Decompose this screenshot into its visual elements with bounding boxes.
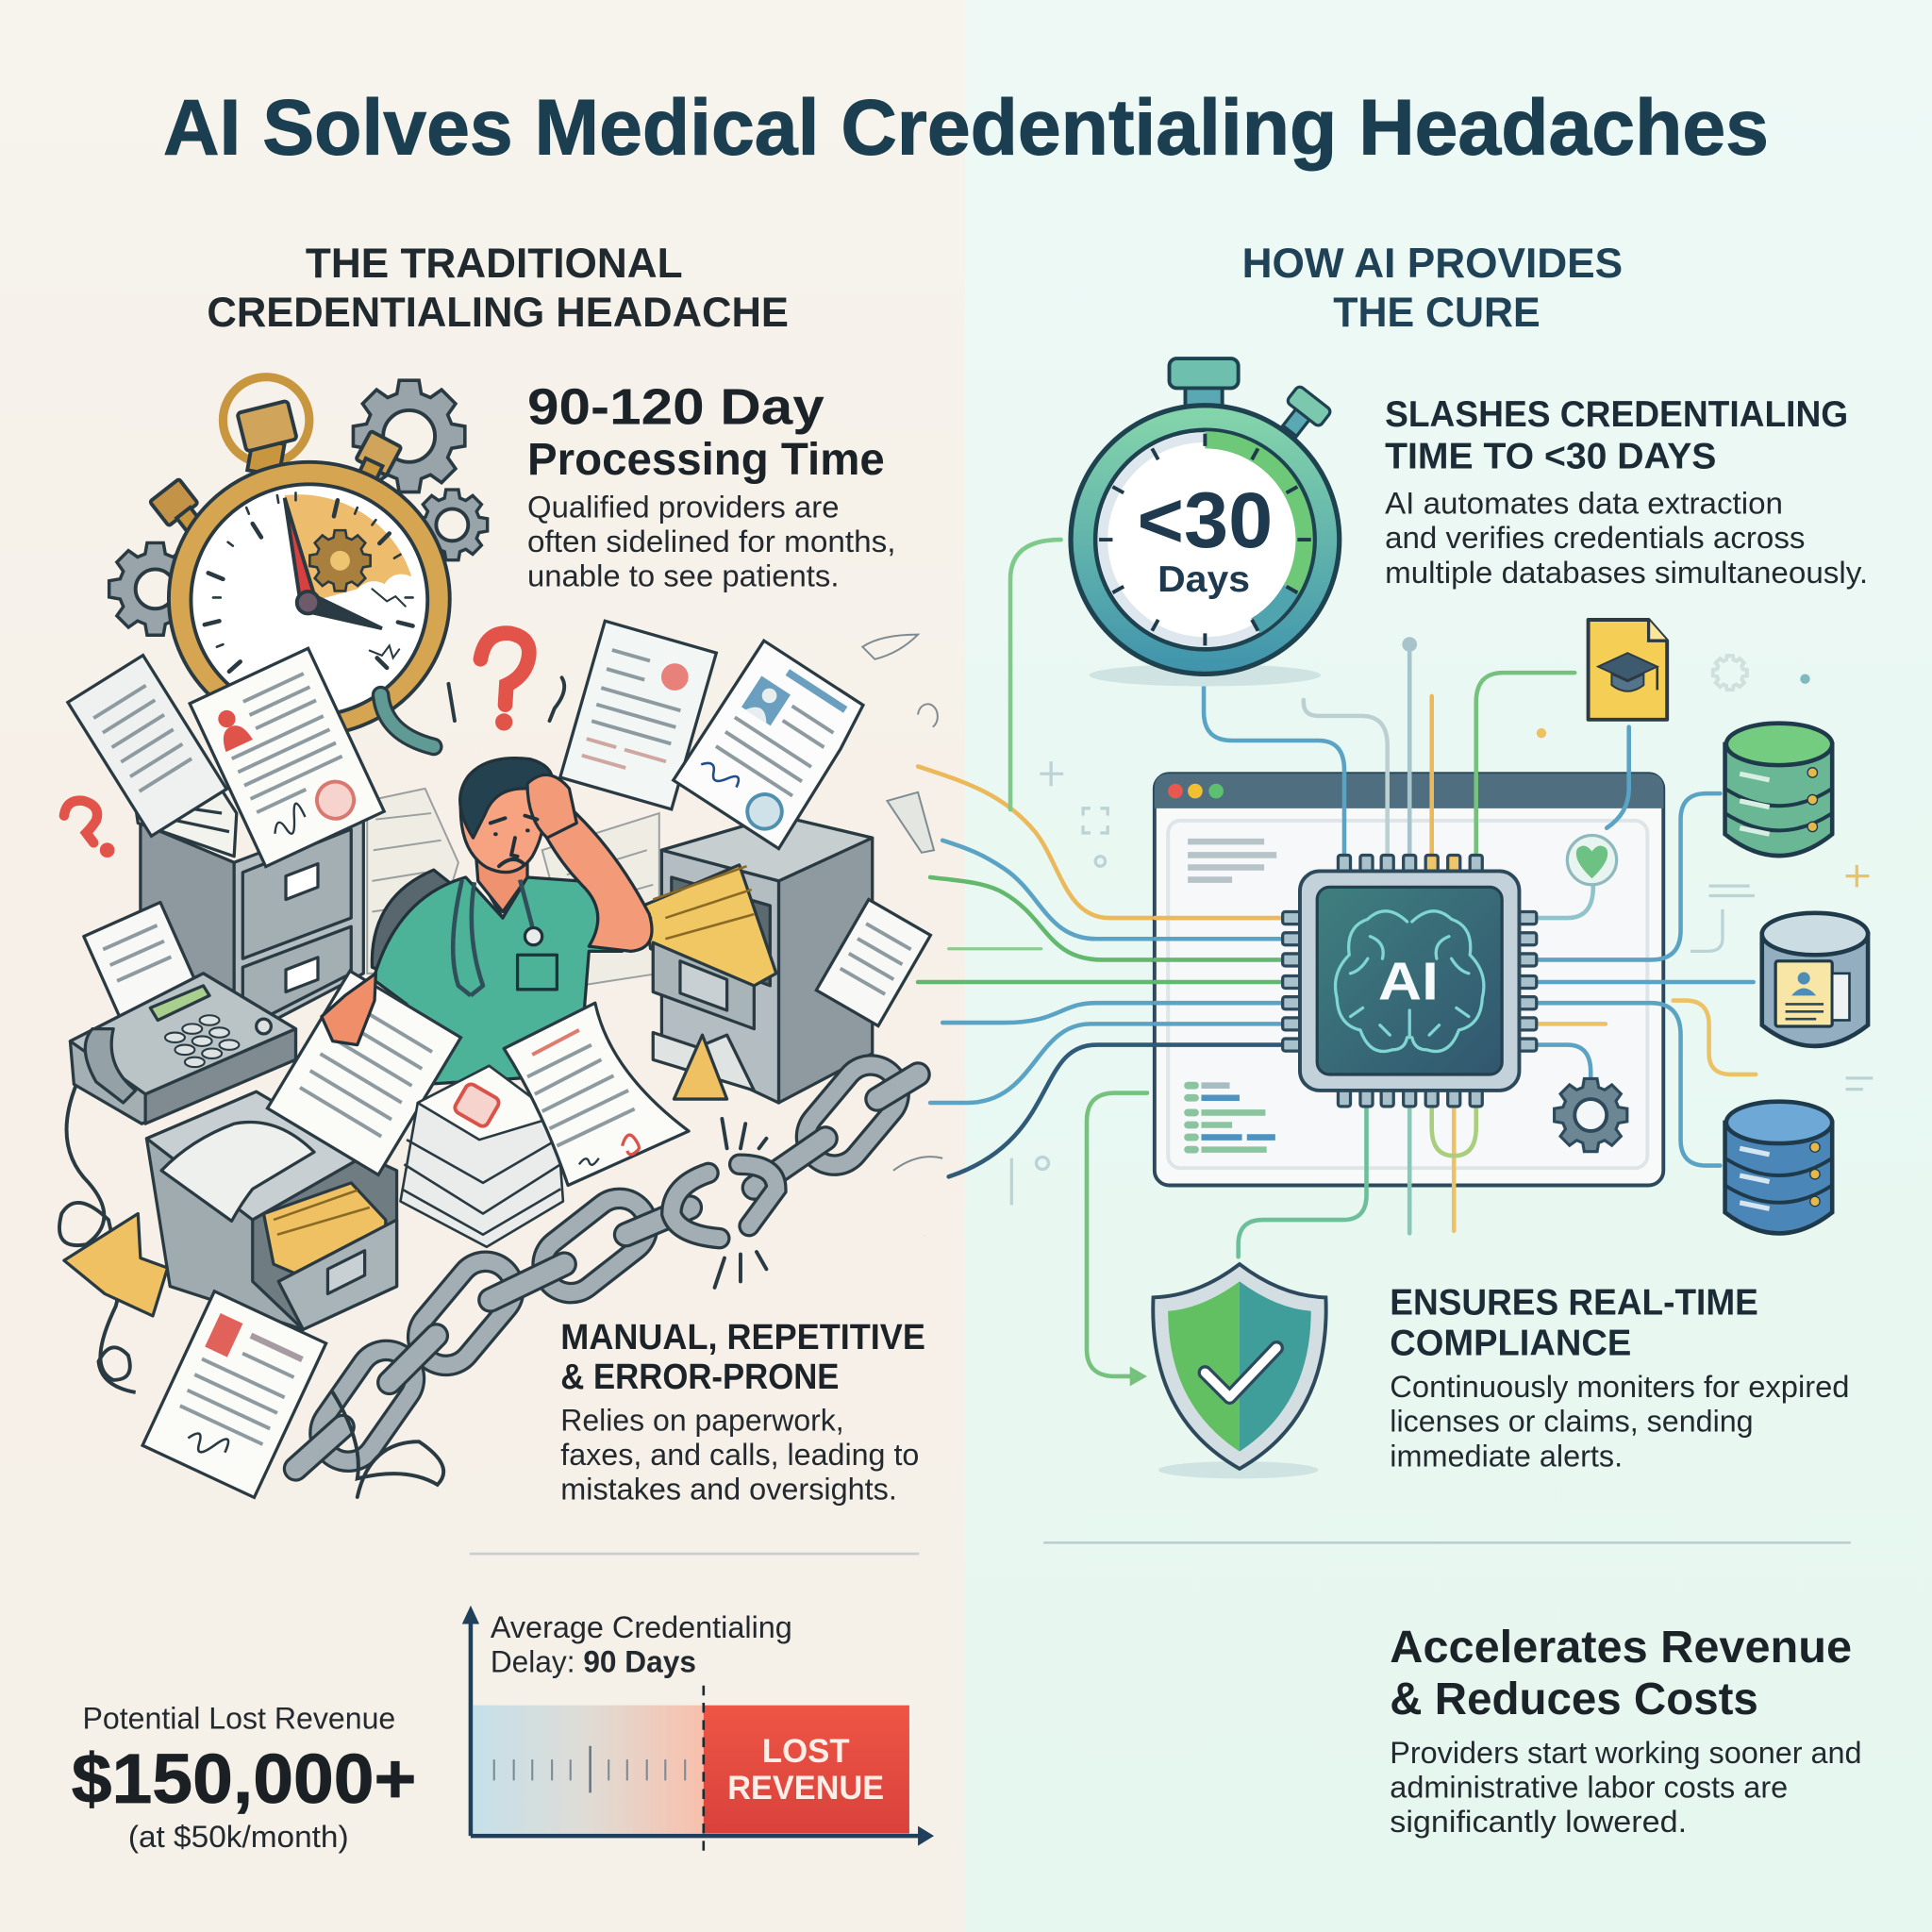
right background <box>965 0 1932 1932</box>
text: processing time: Qualified providers are <box>527 490 839 525</box>
clock case <box>169 462 450 736</box>
icon: green database <box>1725 724 1832 856</box>
icon: telephone handset <box>381 695 434 747</box>
illustration: circuit lines <box>1087 637 1756 1386</box>
text: accelerates revenue: Accelerates Revenue <box>1390 1622 1852 1673</box>
chain edge links <box>295 1074 918 1469</box>
text: processing time: unable to see patients. <box>527 558 839 593</box>
outer ring <box>1071 406 1340 674</box>
day ticks <box>494 1759 685 1780</box>
illustration: fax machine <box>70 903 295 1124</box>
clock hands <box>285 498 315 604</box>
icon: credential document <box>1589 620 1667 720</box>
illustration: yellow folder <box>64 1214 168 1316</box>
stat: potential lost revenue: $150,000+ <box>72 1740 416 1818</box>
text: accelerates revenue: administrative labor costs are <box>1390 1770 1788 1805</box>
text: manual repetitive: & ERROR-PRONE <box>560 1357 839 1397</box>
text: manual repetitive: faxes, and calls, leading to <box>560 1437 919 1472</box>
heading: AI cure: HOW AI PROVIDES <box>1242 241 1623 287</box>
chip pins <box>1283 855 1537 1107</box>
illustration: flowing data lines into chip <box>918 540 1283 1176</box>
text: manual repetitive <box>560 1318 925 1507</box>
chart: credentialing delay <box>462 1606 934 1855</box>
icon: gears <box>109 380 488 635</box>
document to emblem <box>1607 727 1629 828</box>
heading: traditional headache <box>207 241 789 336</box>
text: accelerates revenue: & Reduces Costs <box>1390 1674 1758 1724</box>
small gear on dial <box>309 530 371 591</box>
text: manual repetitive: Relies on paperwork, <box>560 1402 844 1437</box>
paper: stamped form <box>560 621 716 809</box>
chart: credentialing delay: REVENUE <box>727 1770 884 1807</box>
icon: stopwatch under 30 days: Days <box>1158 559 1250 600</box>
illustration: lower filing cabinet <box>146 1091 397 1329</box>
text: real-time compliance: COMPLIANCE <box>1390 1324 1631 1364</box>
undershirt <box>480 880 524 918</box>
inbound left lines over window <box>1155 916 1283 920</box>
chair <box>372 870 458 986</box>
left background <box>0 0 965 1932</box>
arrow line to shield <box>1087 1093 1147 1376</box>
text: accelerates revenue: Providers start working sooner and <box>1390 1735 1862 1770</box>
window buttons <box>1168 784 1183 798</box>
crown <box>1185 386 1223 410</box>
text: real-time compliance: ENSURES REAL-TIME <box>1390 1283 1758 1324</box>
text: real-time compliance: Continuously moniters for expired <box>1390 1369 1849 1404</box>
broken link pieces <box>672 1173 720 1239</box>
inner panel <box>1168 821 1647 1168</box>
text: slashes credentialing time: multiple databases simultaneously. <box>1385 555 1868 590</box>
background paper piles behind doctor <box>367 789 659 986</box>
raised arm <box>537 808 652 951</box>
chain rings <box>308 1054 910 1473</box>
icon: gear in window <box>1555 1078 1627 1152</box>
text: slashes credentialing time: SLASHES CREDENTIALING <box>1385 394 1848 435</box>
illustration: paper stack <box>400 1066 563 1247</box>
dashed marker <box>703 1686 705 1855</box>
text: processing time: often sidelined for months, <box>527 524 896 558</box>
lost revenue block <box>704 1706 909 1834</box>
illustration: void-marked paper <box>504 1003 689 1185</box>
text: slashes credentialing time <box>1385 394 1868 590</box>
text: real-time compliance <box>1390 1283 1849 1473</box>
face ticks <box>1099 434 1311 645</box>
axes <box>471 1617 922 1836</box>
illustration: left filing cabinet <box>133 761 363 1041</box>
illustration: doctor's hand holding paper <box>322 974 375 1045</box>
text: accelerates revenue: significantly lowered. <box>1390 1804 1687 1839</box>
icon: red question marks <box>64 633 564 858</box>
page text lines <box>1188 841 1276 880</box>
AI chip <box>1283 855 1537 1107</box>
dial ticks <box>205 492 413 672</box>
right lines <box>1535 793 1720 959</box>
text: accelerates revenue <box>1390 1622 1862 1839</box>
stopwatch shadow <box>1090 664 1321 687</box>
text: manual repetitive: MANUAL, REPETITIVE <box>560 1318 925 1357</box>
green progress arc <box>1205 440 1305 589</box>
neck and face <box>475 850 527 912</box>
illustration: held paper <box>267 971 460 1174</box>
fax handset <box>85 1029 136 1103</box>
stat: potential lost revenue <box>72 1700 416 1854</box>
cable tangle <box>59 1084 136 1392</box>
side button <box>1274 385 1332 443</box>
label: <30 <box>1138 475 1273 564</box>
open drawer folders <box>643 865 776 986</box>
icon: blue database <box>1725 1102 1832 1233</box>
chart: credentialing delay: LOST <box>762 1733 850 1770</box>
paper: profile document with red stamp <box>190 648 384 867</box>
face details <box>491 816 537 866</box>
icon: stopwatch under 30 days <box>1071 358 1340 687</box>
heading: AI cure: THE CURE <box>1333 290 1541 336</box>
text: real-time compliance: licenses or claims, sending <box>1390 1404 1754 1439</box>
icon: records database <box>1762 913 1868 1046</box>
paper: blue ID document <box>674 641 870 849</box>
heading: traditional headache: CREDENTIALING HEADACHE <box>207 290 789 336</box>
fax paper <box>84 903 198 1021</box>
title: AI Solves Medical Credentialing Headaches <box>163 82 1769 171</box>
text: real-time compliance: immediate alerts. <box>1390 1438 1623 1473</box>
pocket <box>518 955 557 990</box>
chart label: Average Credentialing <box>491 1609 792 1644</box>
emblem link <box>1535 877 1593 918</box>
loose paper pile <box>133 761 237 857</box>
heading: AI cure <box>1242 241 1623 336</box>
text: slashes credentialing time: and verifies credentials across <box>1385 520 1805 555</box>
hand on head <box>527 774 576 838</box>
brain outline <box>1336 911 1484 1051</box>
heading: traditional headache: THE TRADITIONAL <box>306 241 683 287</box>
text: slashes credentialing time: TIME TO <30 DAYS <box>1385 436 1716 476</box>
illustration: browser window <box>1155 774 1663 1185</box>
tail cable <box>333 1392 443 1497</box>
top lines <box>1204 680 1344 855</box>
text: processing time: 90-120 Day <box>527 379 824 435</box>
illustration: broken clock with gears <box>109 377 488 736</box>
text: slashes credentialing time: AI automates data extraction <box>1385 486 1783 521</box>
illustration: breaking chain <box>295 1054 918 1497</box>
illustration: right filing cabinet <box>643 816 873 1103</box>
elapsed wedge <box>285 494 411 603</box>
code lines <box>1201 1083 1230 1088</box>
delay band <box>474 1706 704 1834</box>
paper: back left <box>68 656 226 836</box>
icon: heart emblem <box>1567 836 1617 885</box>
paper: drifting right <box>816 899 930 1025</box>
stat: potential lost revenue: Potential Lost Revenue <box>83 1700 395 1735</box>
AI label: AI <box>1378 951 1439 1010</box>
folders <box>264 1183 386 1279</box>
hair <box>460 758 553 838</box>
stethoscope <box>453 880 532 995</box>
illustration: stressed doctor <box>372 758 652 1084</box>
clock crown and buttons <box>150 377 401 538</box>
text: manual repetitive: mistakes and oversights. <box>560 1472 897 1507</box>
chip body <box>1300 871 1519 1091</box>
decorative tech marks <box>1011 656 1873 1205</box>
scraps drifting at the seam <box>862 635 942 1236</box>
keypad <box>165 1015 239 1067</box>
bottom lines <box>1239 1107 1366 1257</box>
text: processing time: Processing Time <box>527 434 885 485</box>
text: processing time <box>527 379 896 593</box>
stat: potential lost revenue: (at $50k/month) <box>128 1819 349 1854</box>
chart: credentialing delay: Delay: 90 Days <box>491 1643 696 1678</box>
scrubs <box>374 877 651 1084</box>
fracture sparks <box>715 1119 766 1288</box>
icon: compliance shield <box>1153 1264 1326 1478</box>
stopwatch link <box>1010 540 1061 809</box>
illustration: bottom-left paper <box>142 1291 326 1497</box>
face rim <box>1103 438 1307 641</box>
